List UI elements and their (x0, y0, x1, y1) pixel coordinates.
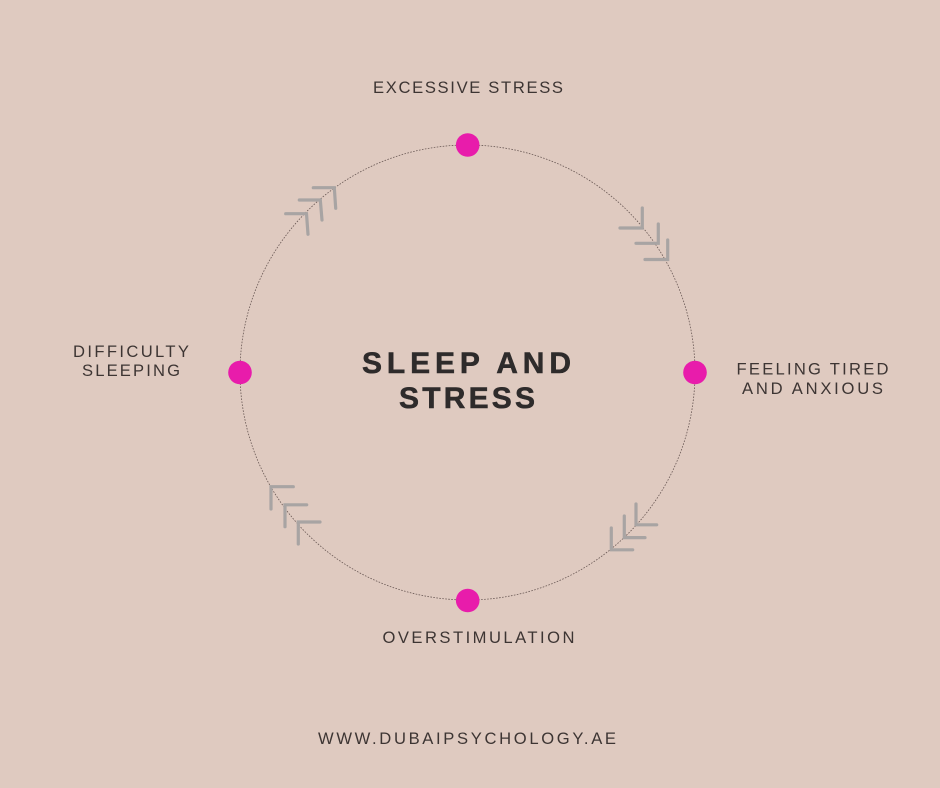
label: difficulty sleeping: DIFFICULTY (73, 342, 189, 361)
title (362, 347, 571, 415)
label: feeling tired and anxious: FEELING TIRED (736, 360, 889, 378)
title: STRESS (399, 382, 535, 415)
arrow: overstimulation to difficulty sleeping (271, 487, 320, 544)
label: feeling tired and anxious: AND ANXIOUS (742, 379, 883, 398)
arrow: excessive stress to feeling tired (620, 208, 668, 260)
website: WWW.DUBAIPSYCHOLOGY.AE (318, 729, 616, 748)
label: excessive stress: EXCESSIVE STRESS (373, 78, 563, 97)
node: bottom (456, 589, 480, 612)
label: difficulty sleeping: SLEEPING (82, 361, 180, 380)
title: SLEEP AND (362, 347, 571, 380)
cycle ring (240, 145, 695, 600)
arrow: feeling tired to overstimulation (611, 504, 657, 550)
arrow: difficulty sleeping to excessive stress (286, 188, 336, 234)
node: top (456, 133, 480, 157)
label: difficulty sleeping (73, 342, 189, 380)
label: feeling tired and anxious (736, 360, 889, 398)
node: right (683, 361, 707, 384)
node: left (228, 361, 252, 384)
label: overstimulation: OVERSTIMULATION (382, 628, 574, 647)
